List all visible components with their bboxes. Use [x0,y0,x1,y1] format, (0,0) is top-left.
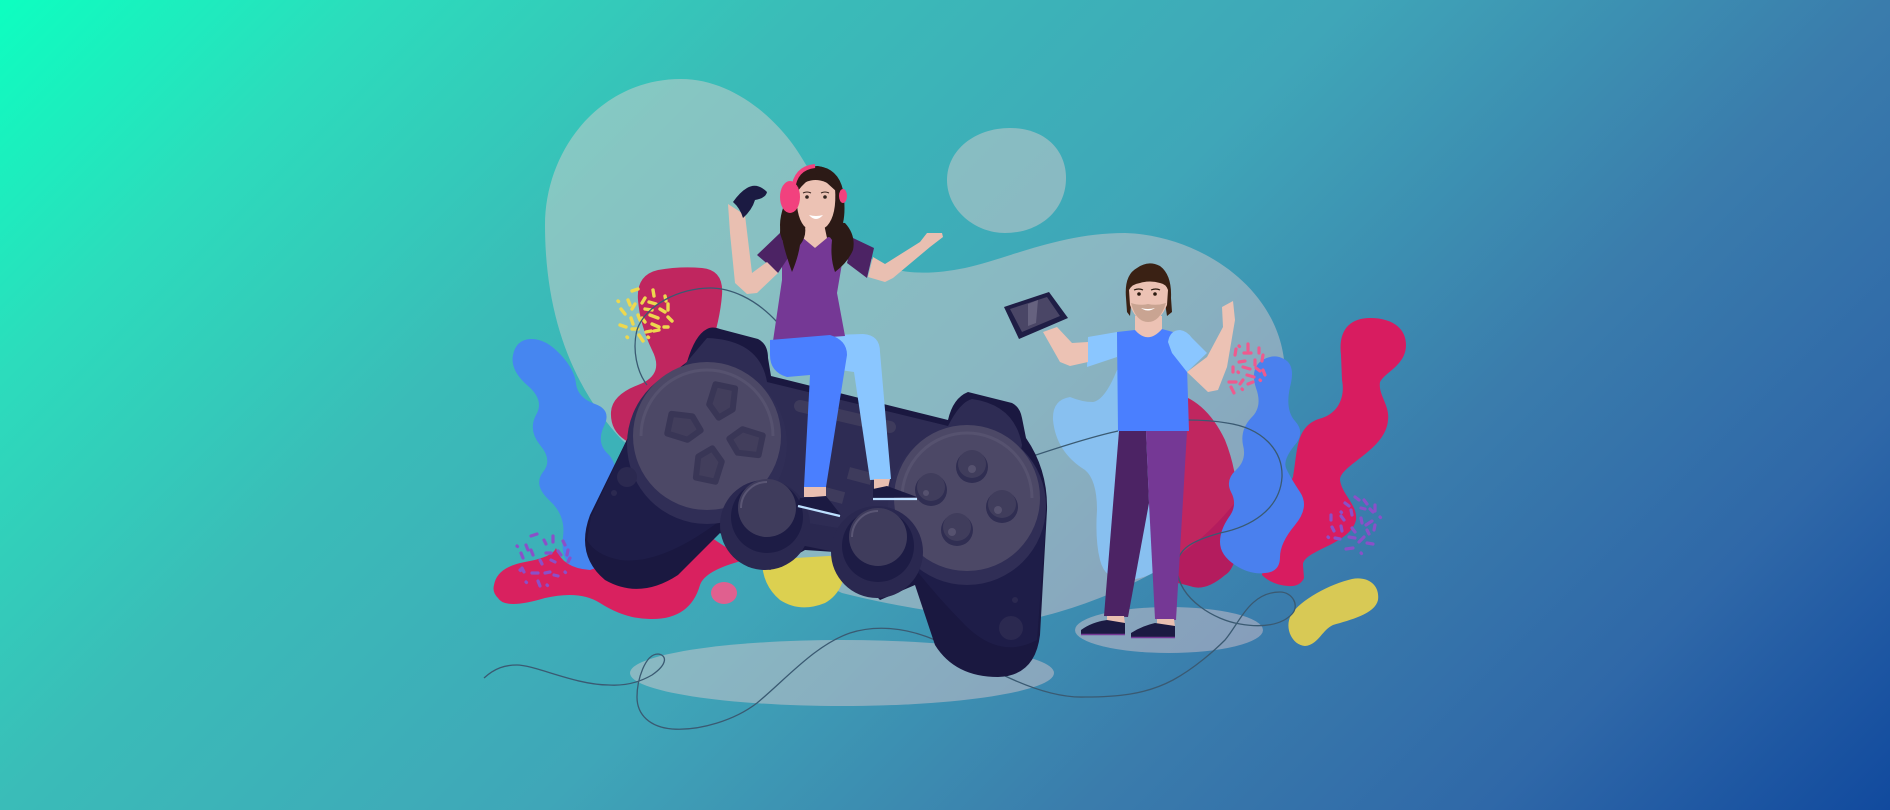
woman back leg [833,334,891,480]
floor shadow under man [1075,607,1263,653]
grip dots [611,467,1023,640]
man right sleeve [1168,330,1207,372]
man facial features [1134,289,1160,310]
light blue blob behind man [1053,370,1180,580]
confetti: purple left [517,534,570,586]
confetti: yellow [618,289,672,341]
bright red wavy blob right [1262,318,1406,586]
woman front leg [770,335,847,487]
left analog stick [720,479,810,570]
woman hair back [780,166,853,272]
woman sleeves [757,233,874,278]
tablet [1004,292,1068,339]
d-pad [667,384,763,482]
center buttons [819,467,873,504]
right analog stick [831,506,923,598]
man beard [1131,303,1166,322]
man shirt [1117,329,1189,431]
headphones [780,166,847,213]
man left shoe [1081,616,1125,634]
man face [1129,282,1168,322]
controller body [585,328,1047,677]
dark red blob top left [611,267,722,442]
small controller in hand [733,186,767,218]
woman top hair [797,166,837,192]
woman left foot [798,487,841,516]
man hair [1126,263,1172,316]
woman right foot [873,479,917,499]
left disk rim [627,364,787,524]
woman hair front locks [780,205,854,272]
yellow blob under controller [762,555,845,607]
man right shoe [1131,619,1175,638]
face buttons [915,450,1018,546]
right disk [894,425,1040,571]
controller upper panel [660,338,1022,570]
confetti: purple right [1328,497,1380,554]
left grip shade [587,423,720,561]
large pale backdrop blob [545,79,1285,618]
woman left arm holding controller [728,204,778,294]
center slot bars [800,406,890,427]
woman facial features [803,192,829,219]
man left sleeve [1087,332,1117,367]
center bridge [790,520,850,555]
game controller [585,328,1047,677]
cable, long wire [484,288,1295,729]
confetti: pink [1212,344,1265,393]
woman torso [773,235,846,341]
right grip shade [916,520,1046,647]
woman character [728,166,943,516]
man right arm [1187,301,1235,392]
small pink dot [711,582,737,604]
red blob bottom left [494,530,745,619]
left disk highlight [641,370,773,436]
small pale round blob [947,128,1066,233]
man trousers right [1146,431,1187,620]
woman face [797,180,835,231]
woman neck [803,224,827,248]
blue wavy blob right [1220,356,1304,573]
man character [1004,263,1235,638]
dark red blob behind man [1165,392,1239,588]
yellow blob far right [1288,578,1378,646]
man neck [1135,316,1162,338]
man left arm [1043,327,1088,366]
left disk [633,362,781,510]
right disk rim [888,427,1046,585]
man trousers left [1104,431,1149,617]
right disk highlight [902,433,1032,498]
floor shadow under controller [630,640,1054,706]
woman right arm [868,233,943,282]
blue wavy blob left [513,339,620,574]
